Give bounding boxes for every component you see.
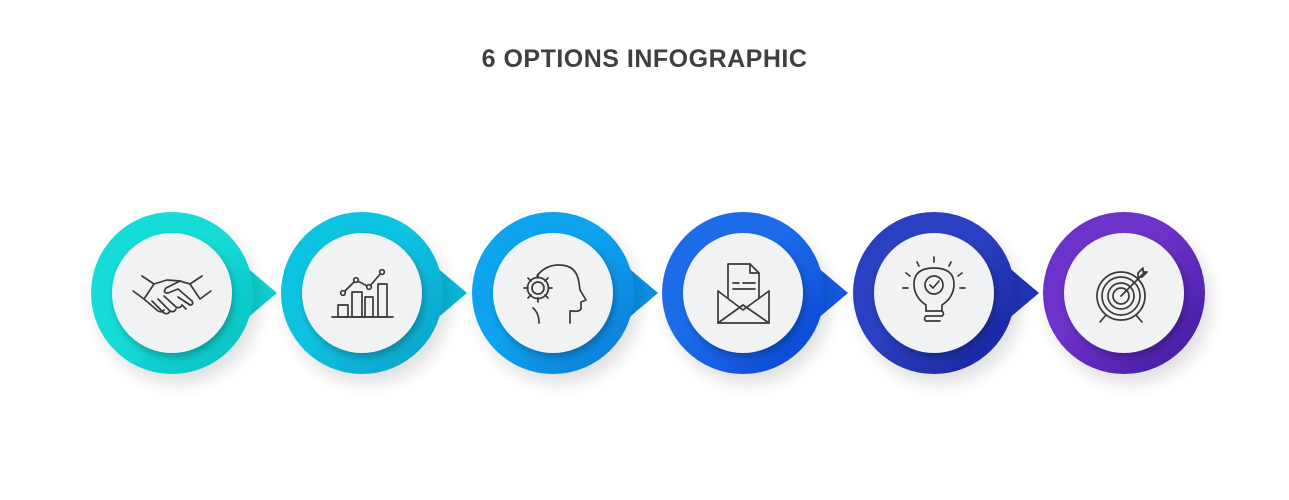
step 1: handshake <box>91 212 277 374</box>
step 6: target <box>1043 212 1205 374</box>
step 3: head gear <box>472 212 658 374</box>
step 2: chart <box>281 212 467 374</box>
step 5: lightbulb <box>853 212 1039 374</box>
icon: bar chart <box>332 270 393 317</box>
icon: envelope with letter <box>718 264 769 323</box>
title: 6 OPTIONS INFOGRAPHIC <box>482 45 807 73</box>
icon: lightbulb with check <box>903 257 965 321</box>
icon: target with arrow <box>1097 268 1147 322</box>
icon: head with gear <box>524 265 586 323</box>
step 4: envelope <box>662 212 848 374</box>
icon: handshake <box>133 276 211 314</box>
